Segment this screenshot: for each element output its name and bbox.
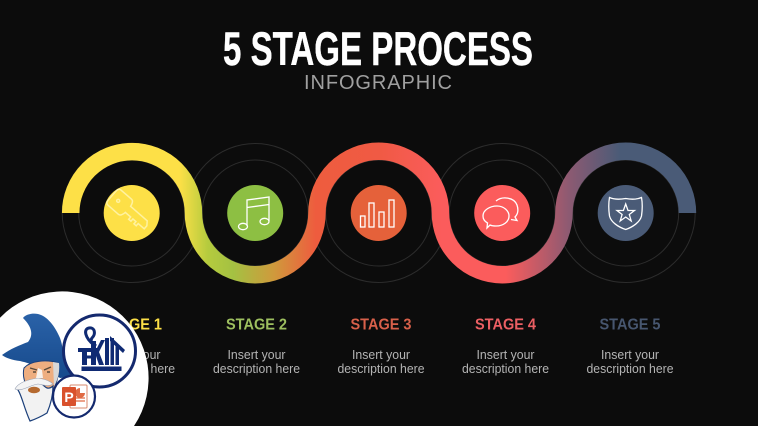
guide rings — [62, 144, 695, 282]
stage 4 icon: chat bubbles — [474, 185, 530, 241]
stage 5 text: STAGE 5 — [600, 316, 661, 334]
stage 4 text: Insert your — [476, 348, 534, 362]
stage 3 text: description here — [338, 362, 425, 376]
wizard mouth — [28, 387, 40, 393]
wizard hair — [53, 362, 59, 386]
stage 4 text — [462, 316, 549, 376]
stage 2 text: Insert your — [228, 348, 286, 362]
wizard nose — [36, 368, 43, 378]
wizard eyes — [30, 367, 51, 372]
stage 3 text: STAGE 3 — [350, 316, 412, 334]
wizard moustache — [15, 378, 53, 390]
stage 5 icon: shield with star — [598, 185, 654, 241]
stage 1 text — [88, 316, 175, 376]
stage 2 text — [213, 316, 300, 376]
stage 1 text: Insert your — [102, 348, 160, 362]
stage 4 text: STAGE 4 — [475, 316, 536, 334]
stage 1 icon: key — [104, 185, 160, 241]
wizard hat — [2, 314, 78, 378]
wizard beard — [18, 381, 53, 421]
stage 5 text — [586, 316, 674, 376]
stage 4 text: description here — [462, 362, 549, 376]
logo base bar — [82, 366, 122, 371]
stage 5 text: description here — [586, 362, 674, 376]
PowerPoint circle icon: P — [64, 389, 74, 405]
stage 2 icon: music notes — [227, 185, 283, 241]
white badge circle — [0, 291, 149, 426]
wizard face — [23, 361, 59, 392]
stage 3 text: Insert your — [352, 348, 410, 362]
stage 3 icon: bar chart — [351, 185, 407, 241]
stage 2 text: description here — [213, 362, 300, 376]
stage 1 text: STAGE 1 — [101, 316, 162, 334]
stage 1 text: description here — [88, 362, 175, 376]
PowerPoint circle icon — [53, 376, 95, 418]
stage 5 text: Insert your — [601, 348, 659, 362]
stage 2 text: STAGE 2 — [226, 316, 287, 334]
subtitle: INFOGRAPHIC — [304, 72, 452, 94]
wizard mascot — [2, 314, 78, 421]
title: 5 STAGE PROCESS — [223, 22, 533, 75]
wave ribbon — [71, 151, 687, 275]
logo circle — [64, 315, 136, 387]
stage 3 text — [338, 316, 425, 376]
